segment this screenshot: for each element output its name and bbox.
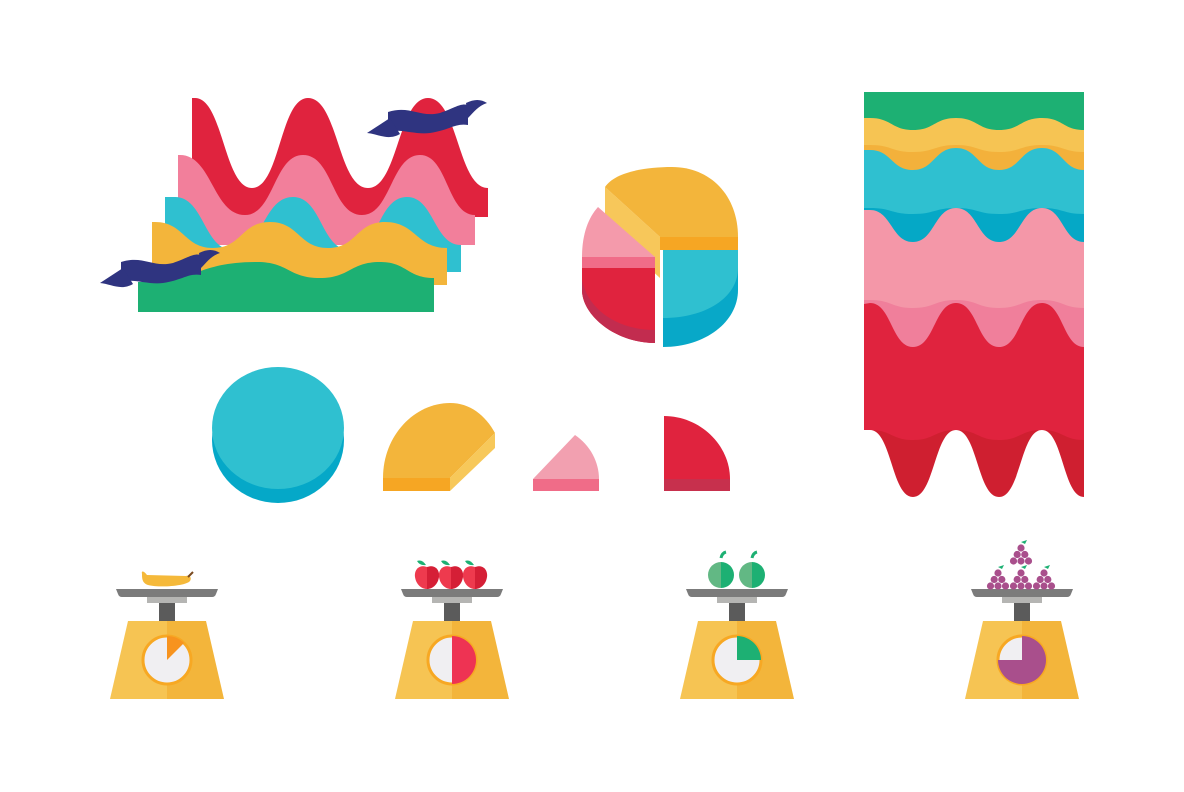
cyan disc [212, 367, 344, 503]
scale: grapes [965, 540, 1079, 699]
yellow pie slice [383, 403, 495, 491]
ribbon: top [367, 100, 487, 137]
stacked wave column [864, 92, 1084, 512]
scale: green apples [680, 552, 794, 699]
red pie slice [664, 416, 730, 491]
scale: apples [395, 560, 509, 699]
icon: apples [415, 560, 487, 589]
exploded pie chart [582, 167, 738, 347]
pink pie slice [533, 435, 599, 491]
icon: banana [142, 571, 193, 586]
icon: grapes [987, 540, 1055, 590]
icon: green apples [708, 552, 765, 588]
scale: banana [110, 571, 224, 699]
ribbon: bottom [100, 250, 220, 287]
wave layer chart [138, 98, 488, 312]
